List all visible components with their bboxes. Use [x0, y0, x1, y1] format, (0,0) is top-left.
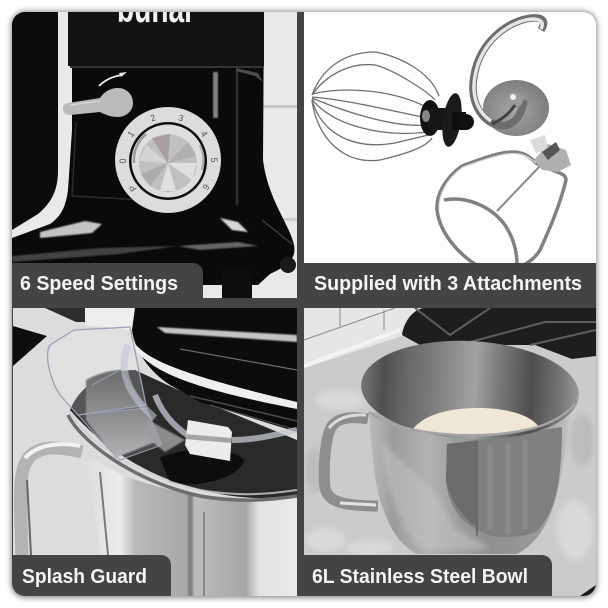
counter corner shadow — [580, 585, 596, 596]
panel: splash guard photo — [13, 308, 297, 596]
label: Splash Guard: Splash Guard — [22, 566, 147, 588]
dough — [413, 408, 539, 434]
dial number 2: 2 — [149, 112, 157, 124]
label: 6L Stainless Steel Bowl: 6L Stainless Steel Bowl — [312, 566, 528, 588]
icon: whisk hub — [420, 92, 474, 148]
bowl outer wall — [369, 405, 571, 554]
mixer head — [132, 308, 297, 432]
dial number 4: 4 — [198, 129, 210, 139]
dial number P: P — [127, 183, 139, 193]
splash guard clip — [185, 420, 232, 461]
label: Splash Guard — [13, 555, 171, 596]
label: 6 Speed Settings — [12, 263, 203, 298]
label: 6 Speed Settings: 6 Speed Settings — [20, 273, 178, 295]
panel: supplied attachments photo — [304, 12, 596, 268]
bowl interior — [359, 335, 581, 445]
dial number 0: 0 — [118, 158, 128, 164]
dial number 6: 6 — [200, 182, 212, 192]
marble mottling — [305, 390, 594, 560]
mixer foot — [222, 285, 252, 298]
label: Supplied with 3 Attachments: Supplied with 3 Attachments — [314, 273, 582, 295]
dial number 5: 5 — [209, 157, 219, 163]
bowl handle — [21, 448, 82, 555]
dark mixer behind bowl — [402, 308, 596, 359]
splash guard — [48, 327, 297, 460]
icon: whisk attachment — [312, 52, 439, 161]
dial number 1: 1 — [126, 129, 136, 139]
bowl outer wall — [102, 465, 297, 596]
icon: dough hook — [473, 18, 549, 136]
wall tiles — [304, 308, 420, 368]
bowl handle — [324, 415, 378, 506]
tilt arrow — [99, 72, 127, 86]
mixer bowl edge — [12, 12, 58, 230]
speed dial — [115, 107, 221, 213]
mixer body — [12, 66, 294, 285]
bowl interior — [70, 370, 297, 498]
body highlights — [213, 72, 218, 118]
panel: stainless steel bowl photo — [304, 308, 596, 596]
bowl rim — [369, 404, 575, 435]
label: 6L Stainless Steel Bowl — [304, 555, 552, 596]
panel: 6 speed settings photo — [12, 0, 297, 298]
dial number 3: 3 — [177, 113, 185, 123]
tilt lever — [63, 88, 133, 117]
icon: flat beater — [437, 135, 571, 268]
